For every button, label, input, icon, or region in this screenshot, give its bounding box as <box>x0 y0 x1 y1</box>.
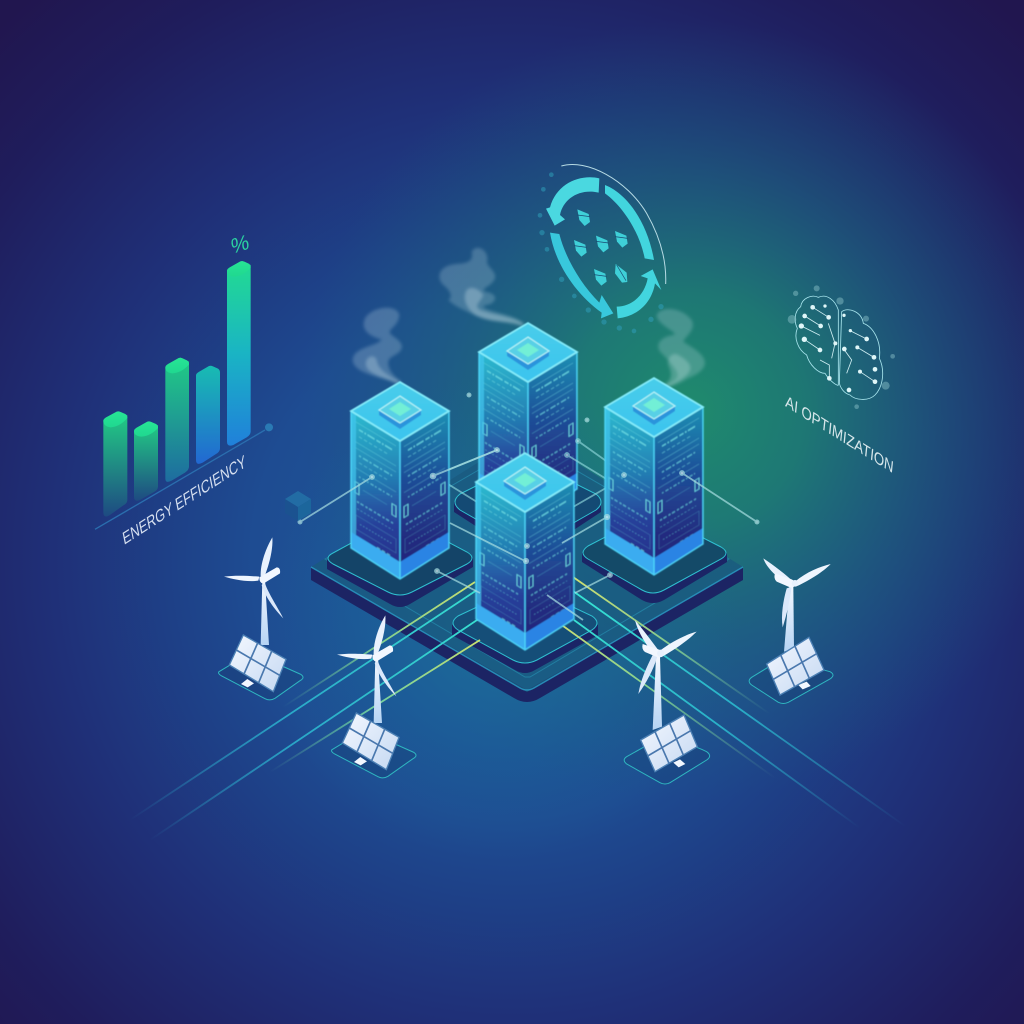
smoke rising from servers <box>353 248 705 389</box>
thin orbit arc <box>561 164 666 284</box>
server pad: right <box>582 510 727 603</box>
platform base <box>311 432 743 702</box>
circuit nodes <box>799 304 877 392</box>
cycle arrows <box>546 177 661 318</box>
wind turbine and solar panel 2 <box>332 615 416 778</box>
circuit traces <box>801 307 875 382</box>
renewable power lines <box>130 577 905 840</box>
label: energy efficiency: ENERGY EFFICIENCY <box>121 451 247 549</box>
server tower: back <box>479 323 577 520</box>
server pad: back <box>454 462 601 560</box>
percent label: % <box>230 230 250 259</box>
smoke: right tower <box>657 309 705 389</box>
bar chart: energy efficiency <box>95 261 273 529</box>
bar 4 <box>196 366 220 464</box>
icon: optimization cycle <box>538 164 666 333</box>
axis line <box>95 423 273 529</box>
brain outline <box>795 296 838 385</box>
server tower: right <box>605 378 703 575</box>
server pad: front <box>452 587 598 673</box>
bar 2 <box>134 421 158 501</box>
wind turbine and solar panel 1 <box>219 537 303 700</box>
icon: AI brain <box>788 285 895 409</box>
server tower: front <box>476 453 574 650</box>
connector lines and nodes <box>298 393 759 620</box>
wind turbine and solar panel 3 <box>624 620 710 784</box>
smoke: left tower <box>353 308 402 384</box>
icon: isometric cube <box>285 491 311 521</box>
bar 3 <box>165 358 189 482</box>
orbit dots <box>538 172 664 333</box>
server pad: back surface <box>455 463 601 545</box>
bar 5 <box>227 261 251 446</box>
server pad: left <box>327 515 473 607</box>
wind turbine and solar panel 4 <box>749 558 833 703</box>
server tower: left <box>351 382 449 579</box>
smoke: back tower <box>439 248 524 326</box>
data cells <box>574 209 628 286</box>
floating particles <box>788 285 895 409</box>
label: AI optimization: AI OPTIMIZATION <box>785 392 894 477</box>
bar 1 <box>103 411 127 517</box>
connector lines behind front tower <box>433 439 625 507</box>
